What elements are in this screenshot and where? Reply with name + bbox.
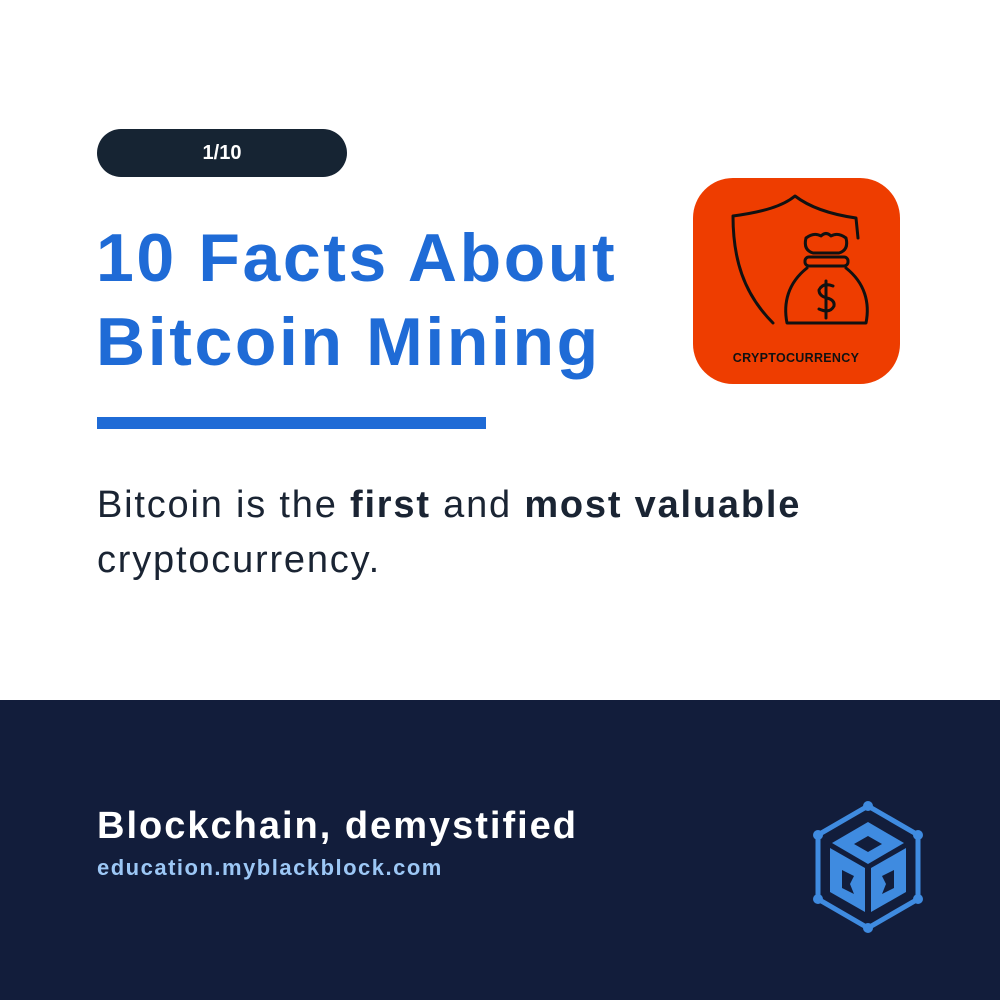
- body text: [97, 484, 801, 581]
- tagline: Blockchain, demystified: [97, 805, 578, 847]
- title: 10 Facts About: [96, 220, 617, 296]
- footer panel: [0, 700, 1000, 1000]
- icon: cryptocurrency: CRYPTOCURRENCY: [733, 351, 860, 365]
- title underline: [97, 417, 486, 429]
- url: education.myblackblock.com: [97, 855, 443, 880]
- title: Bitcoin Mining: [96, 304, 601, 380]
- body text: cryptocurrency.: [97, 539, 381, 581]
- body text: Bitcoin is the first and most valuable: [97, 484, 801, 526]
- icon: cryptocurrency: [693, 178, 900, 384]
- title: [96, 220, 617, 380]
- page badge: [97, 129, 347, 177]
- logo: [813, 801, 923, 933]
- page badge: 1/10: [203, 142, 241, 164]
